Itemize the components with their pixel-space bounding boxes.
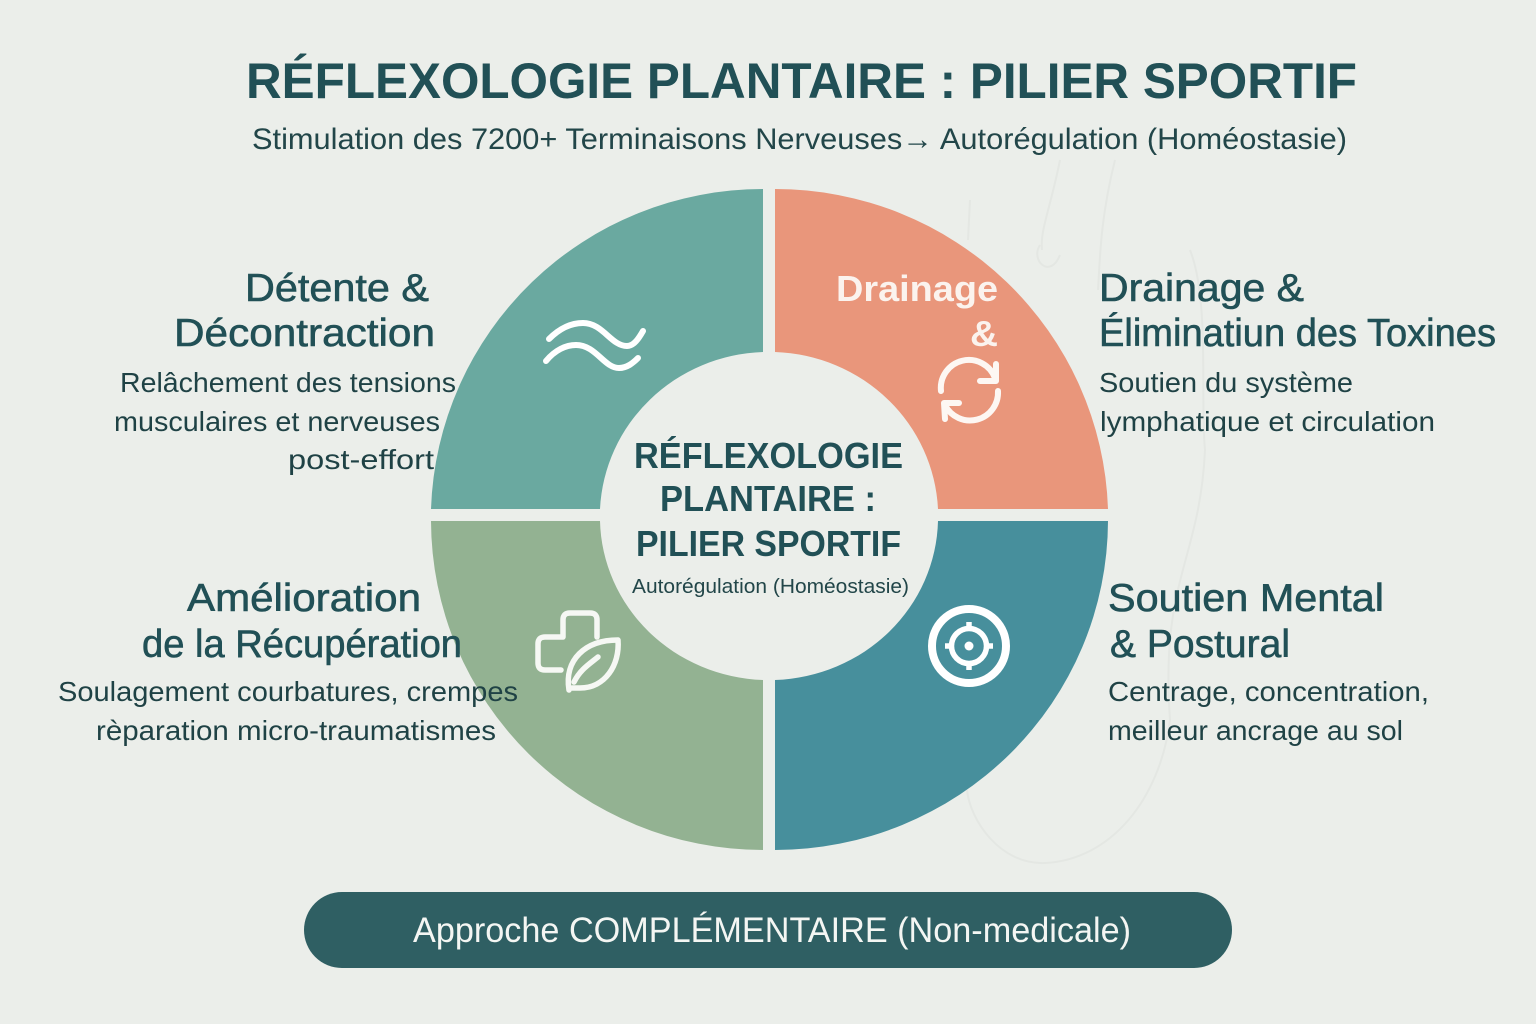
text block: soutien mental: Soutien Mental [1108,577,1384,620]
footer pill: Approche COMPLÉMENTAIRE (Non-medicale) [413,911,1131,950]
subtitle: Stimulation des 7200+ Terminaisons Nerveuses→ Autorégulation (Homéostasie) [252,123,1347,156]
label inside drainage segment: & [970,313,998,354]
text block: récupération: rèparation micro-traumatismes [96,715,496,746]
icon: cross and leaf [538,613,618,690]
text block: détente: Décontraction [174,312,435,355]
text block: récupération: Amélioration [187,577,421,620]
centre text: RÉFLEXOLOGIE [634,435,903,476]
segment: drainage [775,189,1108,509]
text block: drainage: Drainage & [1099,267,1304,310]
icon: refresh arrows [941,360,998,420]
text block: détente: Relâchement des tensions [120,367,456,398]
faint foot outline watermark [967,160,1205,863]
text block: drainage: lymphatique et circulation [1100,406,1435,437]
text block: soutien mental: & Postural [1110,623,1290,666]
text block: récupération: Soulagement courbatures, crempes [58,676,518,707]
text block: détente: musculaires et nerveuses [114,406,440,437]
text block: soutien mental: meilleur ancrage au sol [1108,715,1403,746]
title: RÉFLEXOLOGIE PLANTAIRE : PILIER SPORTIF [246,53,1357,109]
segment: détente [431,189,763,509]
text block: soutien mental [1108,577,1429,746]
icon: target [932,609,1006,683]
label inside drainage segment: Drainage [836,268,998,309]
text block: drainage [1099,267,1496,437]
label inside drainage segment [836,268,998,354]
text block: détente [114,267,456,475]
text block: détente: Détente & [245,267,429,310]
text block: drainage: Éliminatiun des Toxines [1099,312,1496,355]
text block: récupération [58,577,518,746]
segment: soutien mental [775,521,1108,850]
centre text: Autorégulation (Homéostasie) [632,576,909,598]
text block: drainage: Soutien du système [1099,367,1353,398]
icon: waves [546,323,643,368]
ring diagram [431,189,1108,850]
footer pill [304,892,1232,968]
centre text [632,435,909,598]
text block: soutien mental: Centrage, concentration, [1108,676,1429,707]
centre text: PLANTAIRE : [660,478,876,519]
text block: détente: post-effort [288,444,434,475]
text block: récupération: de la Récupération [142,623,462,666]
centre text: PILIER SPORTIF [636,523,901,564]
segment: récupération [431,521,763,850]
